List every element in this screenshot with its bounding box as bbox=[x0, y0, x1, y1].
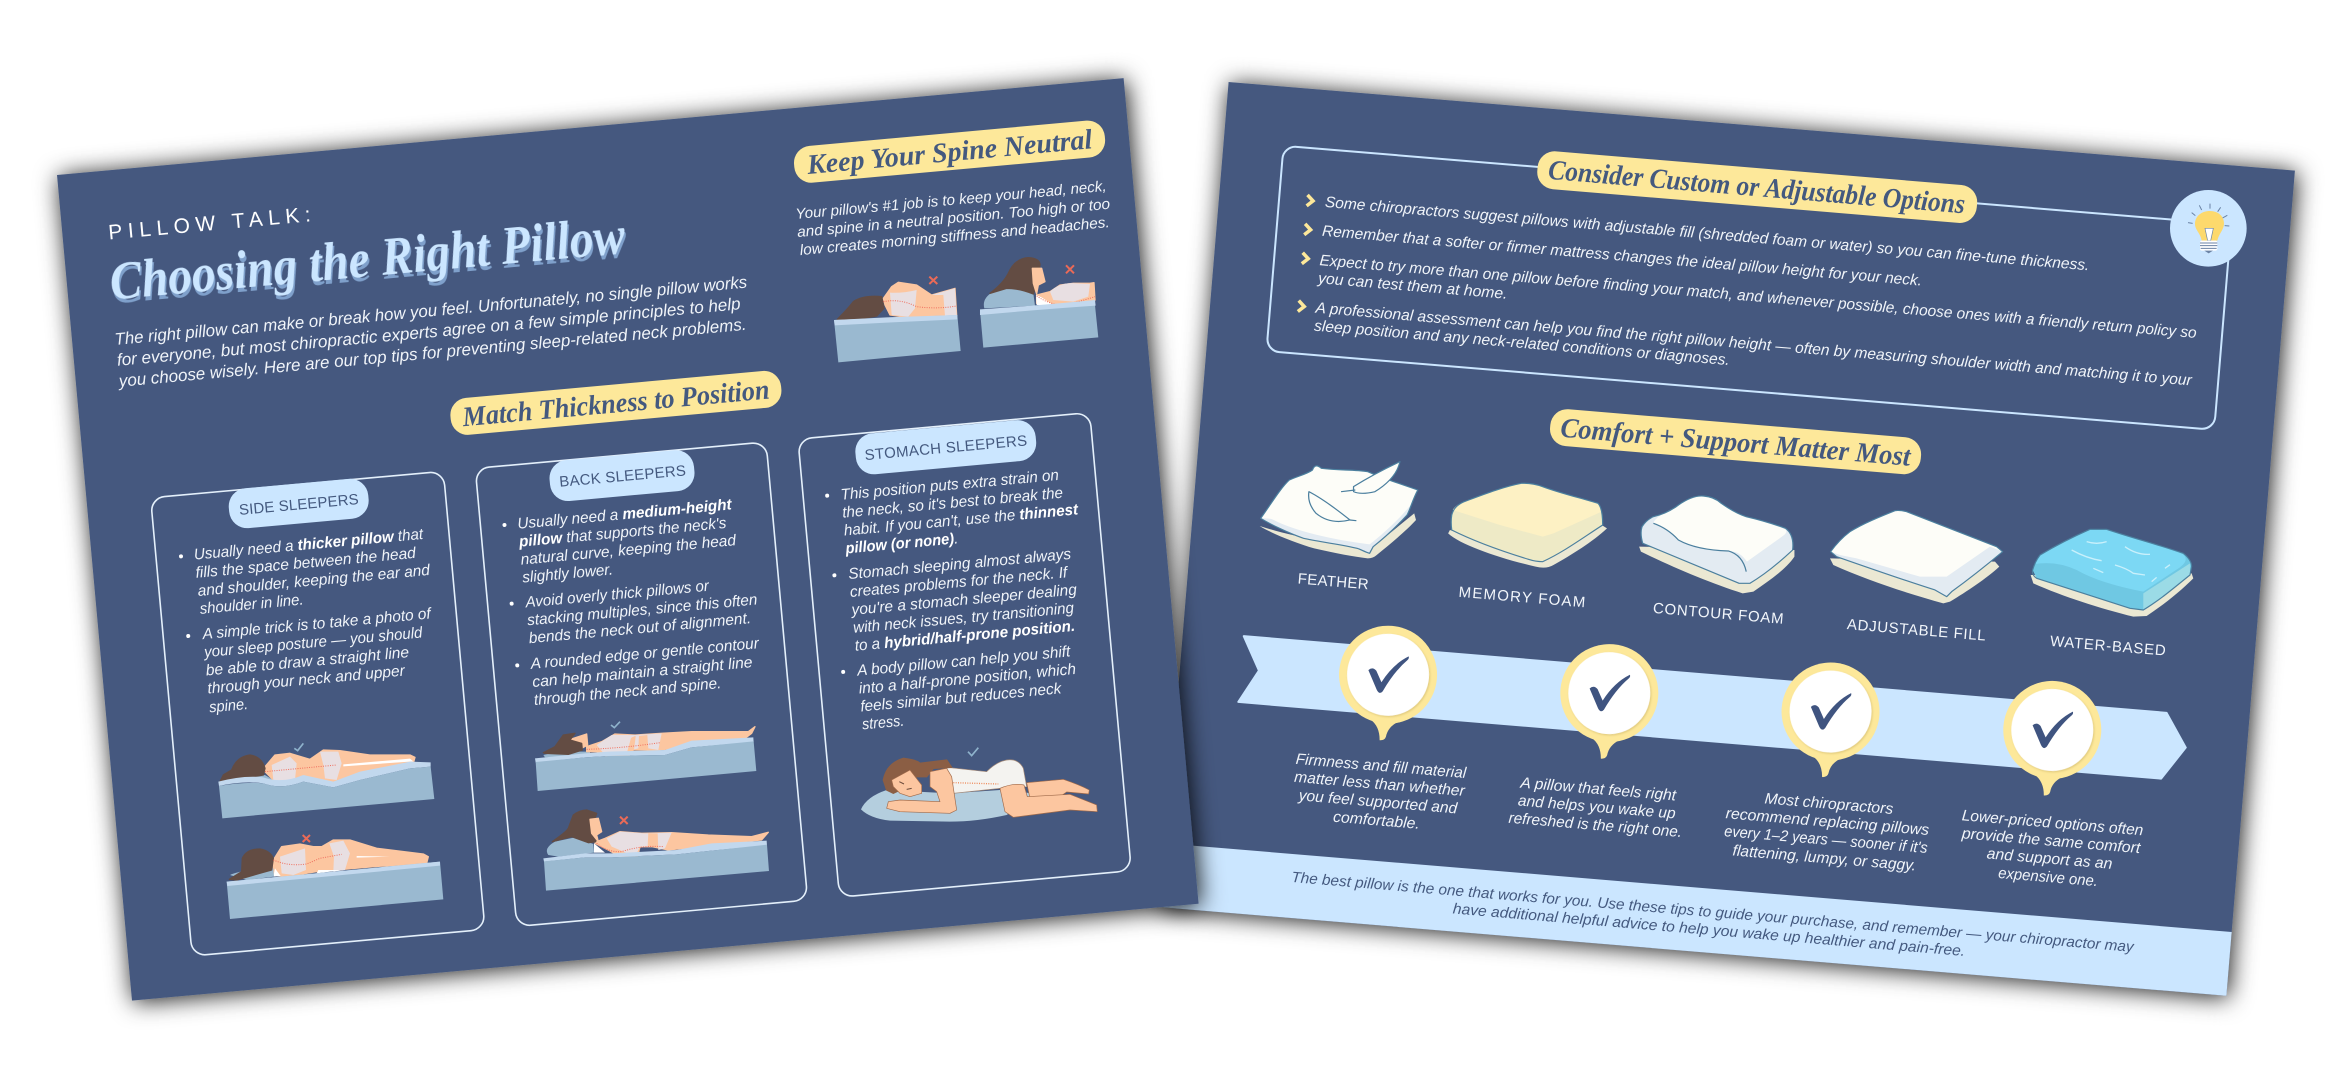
text: stomach sleepers tips: creates problems for the neck. If bbox=[849, 564, 1070, 601]
panel: right sheet bbox=[1160, 82, 2295, 996]
text: back sleepers tips: A rounded edge or gentle contour bbox=[529, 635, 760, 673]
text: side sleepers tips: Usually need a thicker pillow that bbox=[193, 526, 424, 564]
card: side sleepers bbox=[151, 471, 485, 956]
text: stomach sleepers tips: habit. If you can't, use the thinnest bbox=[843, 501, 1080, 540]
text: back sleepers tips: Avoid overly thick pillows or bbox=[524, 578, 710, 611]
text: back sleepers tips: pillow that supports the neck's bbox=[517, 515, 727, 551]
ribbon arrow bbox=[1238, 636, 2189, 780]
icon: contour foam pillow bbox=[1639, 496, 1794, 593]
check pin 3 bbox=[1776, 659, 1883, 781]
text: lower-priced options: provide the same comfort bbox=[1960, 825, 2142, 857]
chevron list: you can test them at home. bbox=[1316, 270, 1508, 303]
text: firmness: comfortable. bbox=[1332, 809, 1420, 833]
text: feels right: refreshed is the right one. bbox=[1508, 810, 1683, 841]
text: firmness: Firmness and fill material bbox=[1295, 751, 1467, 782]
text: stomach sleepers tips: stress. bbox=[861, 713, 905, 733]
text: side sleepers tips: be able to draw a straight line bbox=[205, 644, 410, 680]
pill: back sleepers: BACK SLEEPERS bbox=[559, 462, 687, 491]
text: back sleepers tips: slightly lower. bbox=[522, 561, 614, 587]
text: side sleepers tips: shoulder in line. bbox=[199, 591, 304, 618]
text: stomach sleepers tips: with neck issues, try transitioning bbox=[853, 600, 1075, 637]
chevron list: sleep position and any neck-related conditions or diagnoses. bbox=[1313, 318, 1730, 369]
text: replacing pillows: Most chiropractors bbox=[1764, 790, 1894, 818]
pill: side sleepers: SIDE SLEEPERS bbox=[238, 491, 359, 519]
chevron list: Expect to try more than one pillow before finding your match, and whenever possible, choose ones with a friendly return policy so bbox=[1319, 252, 2198, 342]
illustration: side sleeper bad bbox=[227, 835, 443, 919]
panel: left sheet bbox=[57, 78, 1199, 1001]
text: back sleepers tips: Usually need a medium-height bbox=[517, 496, 733, 533]
panel: custom or adjustable options bbox=[1266, 129, 2233, 430]
pillow type labels bbox=[1297, 570, 2167, 660]
icon: water-based pillow bbox=[2031, 529, 2193, 617]
pill: stomach sleepers: STOMACH SLEEPERS bbox=[864, 432, 1028, 464]
text: lower-priced options: expensive one. bbox=[1998, 865, 2099, 890]
text: lower-priced options bbox=[1957, 807, 2144, 894]
text: stomach sleepers tips: feels similar but reduces neck bbox=[860, 680, 1063, 715]
pillow type labels: MEMORY FOAM bbox=[1458, 584, 1586, 611]
text: back sleepers tips: stacking multiples, since this often bbox=[526, 591, 758, 629]
footer band bbox=[1160, 843, 2232, 996]
text: back sleepers tips: natural curve, keeping the head bbox=[520, 532, 738, 569]
icon: light bulb bbox=[2170, 190, 2247, 267]
text: firmness: you feel supported and bbox=[1297, 787, 1459, 818]
pillow type labels: WATER-BASED bbox=[2049, 633, 2167, 660]
pill: back sleepers bbox=[548, 449, 696, 503]
illustration: half-prone sleeper bbox=[861, 748, 1097, 822]
pill: side sleepers bbox=[227, 477, 370, 530]
text: stomach sleepers tips: you're a stomach sleeper dealing bbox=[850, 581, 1078, 619]
footer text: The best pillow is the one that works for you. Use these tips to guide your purchase, and remember — your chiropractor may bbox=[1291, 869, 2136, 956]
text: lower-priced options: and support as an bbox=[1986, 845, 2113, 873]
chevron list: A professional assessment can help you find the right pillow height — often by measuring shoulder width and matching it to your bbox=[1314, 300, 2193, 390]
text: feels right: and helps you wake up bbox=[1517, 792, 1677, 823]
check pin 4 bbox=[1998, 677, 2105, 800]
text: spine neutral: and spine in a neutral position. Too high or too bbox=[796, 196, 1111, 241]
intro paragraph: you choose wisely. Here are our top tips for preventing sleep-related neck problems. bbox=[117, 315, 747, 391]
text: back sleepers tips: bends the neck out of alignment. bbox=[528, 610, 752, 647]
text: stomach sleepers tips: pillow (or none). bbox=[844, 530, 959, 558]
pillow type labels: ADJUSTABLE FILL bbox=[1846, 616, 1986, 645]
chevron list: Some chiropractors suggest pillows with adjustable fill (shredded foam or water) so you can fine-tune thickness. bbox=[1324, 194, 2090, 274]
pill: stomach sleepers bbox=[854, 419, 1038, 476]
heading: keep your spine neutral: Keep Your Spine Neutral bbox=[805, 124, 1094, 181]
text: lower-priced options: Lower-priced options often bbox=[1961, 807, 2144, 839]
text: stomach sleepers tips: into a half-prone position, which bbox=[858, 661, 1077, 698]
card: stomach sleepers bbox=[798, 413, 1131, 897]
card: back sleepers bbox=[475, 442, 808, 926]
text: replacing pillows bbox=[1722, 787, 1931, 875]
text: stomach sleepers tips: This position puts extra strain on bbox=[840, 467, 1060, 504]
text: stomach sleepers tips: the neck, so it's best to break the bbox=[842, 485, 1064, 522]
illustration: side sleeper good bbox=[218, 743, 434, 818]
eyebrow: pillow talk: PILLOW TALK: bbox=[107, 203, 312, 245]
pillow type labels: CONTOUR FOAM bbox=[1652, 600, 1784, 628]
text: replacing pillows: recommend replacing pillows bbox=[1725, 805, 1930, 839]
text: back sleepers tips: through the neck and spine. bbox=[533, 675, 722, 709]
text: side sleepers tips: A simple trick is to take a photo of bbox=[201, 605, 433, 643]
text: back sleepers tips bbox=[502, 495, 765, 710]
text: stomach sleepers tips: A body pillow can help you shift bbox=[855, 643, 1072, 680]
check pin 1 bbox=[1334, 622, 1441, 745]
text: stomach sleepers tips bbox=[824, 465, 1097, 735]
pillow type labels: FEATHER bbox=[1297, 570, 1369, 593]
chevron list: Remember that a softer or firmer mattress changes the ideal pillow height for your neck. bbox=[1321, 223, 1923, 290]
intro paragraph: The right pillow can make or break how you feel. Unfortunately, no single pillow works bbox=[114, 273, 748, 349]
text: side sleepers tips bbox=[178, 525, 442, 718]
text: feels right: A pillow that feels right bbox=[1519, 775, 1677, 805]
icon: adjustable fill pillow bbox=[1830, 510, 2003, 603]
text: side sleepers tips: through your neck and upper bbox=[207, 663, 406, 697]
icon: memory foam pillow bbox=[1448, 483, 1607, 568]
text: back sleepers tips: can help maintain a straight line bbox=[532, 654, 754, 691]
text: firmness bbox=[1291, 751, 1468, 836]
heading: comfort and support: Comfort + Support Matter Most bbox=[1559, 413, 1913, 473]
text: replacing pillows: every 1–2 years — sooner if it's bbox=[1724, 823, 1928, 857]
illustration: back sleeper good bbox=[535, 722, 756, 791]
text: feels right bbox=[1508, 774, 1686, 841]
illustration: back sleeper bad bbox=[543, 810, 769, 891]
intro paragraph: for everyone, but most chiropractic experts agree on a few simple principles to help bbox=[116, 294, 741, 370]
intro paragraph bbox=[113, 273, 752, 391]
text: stomach sleepers tips: to a hybrid/half-prone position. bbox=[854, 618, 1076, 655]
text: side sleepers tips: and shoulder, keeping the ear and bbox=[197, 562, 432, 600]
text: stomach sleepers tips: Stomach sleeping almost always bbox=[848, 546, 1072, 583]
text: replacing pillows: flattening, lumpy, or saggy. bbox=[1732, 842, 1917, 875]
footer text: have additional helpful advice to help you wake up healthier and pain-free. bbox=[1452, 900, 1966, 960]
text: side sleepers tips: fills the space between the head bbox=[195, 545, 418, 582]
text: spine neutral bbox=[795, 178, 1112, 259]
text: side sleepers tips: spine. bbox=[208, 696, 249, 716]
chevron list bbox=[1296, 192, 2203, 407]
illustration: bad spine positions bbox=[834, 258, 1098, 362]
text: firmness: matter less than whether bbox=[1294, 769, 1466, 800]
icon: feather pillow bbox=[1260, 462, 1418, 558]
text: side sleepers tips: your sleep posture — you should bbox=[202, 624, 424, 661]
title: Choosing the Right Pillow bbox=[107, 205, 628, 312]
text: spine neutral: low creates morning stiffness and headaches. bbox=[799, 214, 1110, 259]
heading: consider custom: Consider Custom or Adjustable Options bbox=[1547, 155, 1966, 220]
heading: match thickness to position: Match Thickness to Position bbox=[460, 375, 771, 433]
check pin 2 bbox=[1555, 640, 1662, 763]
text: spine neutral: Your pillow's #1 job is to keep your head, neck, bbox=[795, 178, 1107, 223]
